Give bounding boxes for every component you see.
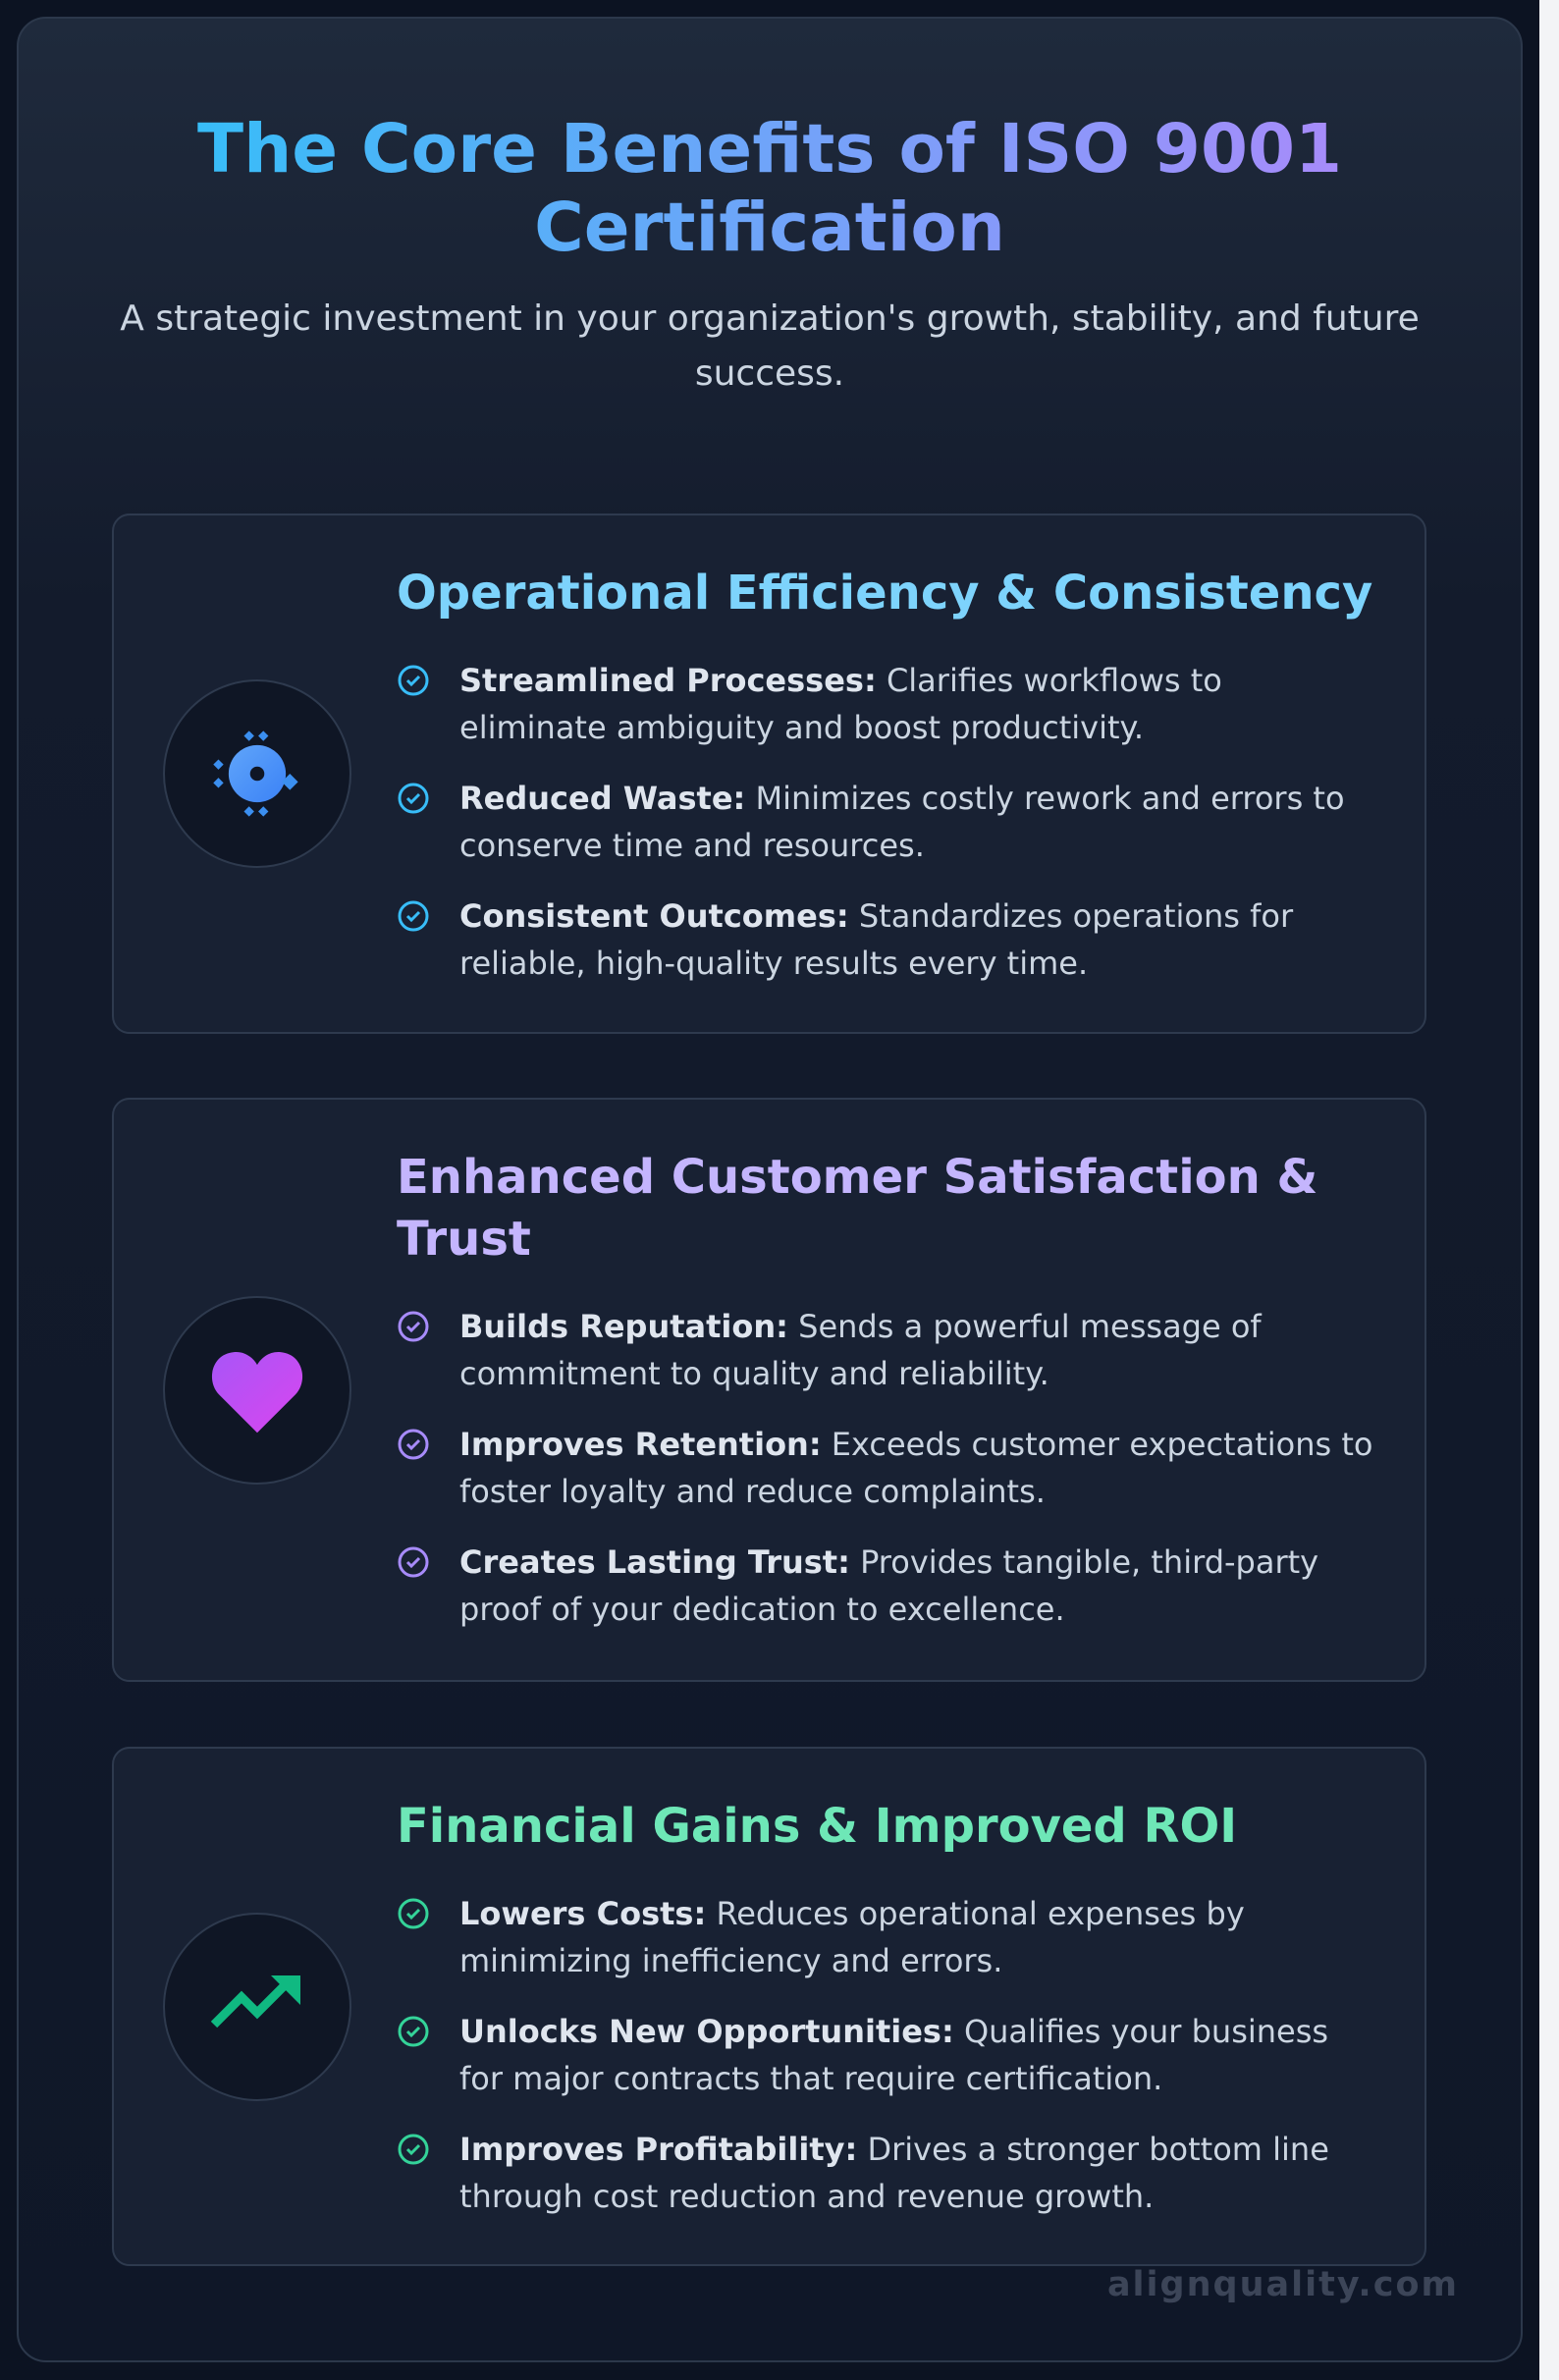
item: Creates Lasting Trust: Provides tangible, third-party proof of your dedication to excellence. bbox=[459, 1543, 1318, 1628]
text block bbox=[397, 566, 1372, 982]
heading: Enhanced Customer Satisfaction & Trust bbox=[397, 1150, 1317, 1267]
heading: Financial Gains & Improved ROI bbox=[397, 1799, 1237, 1854]
text block bbox=[397, 1799, 1329, 2215]
item: Improves Profitability: Drives a stronger bottom line through cost reduction and revenue growth. bbox=[459, 2131, 1329, 2215]
title: The Core Benefits of ISO 9001 bbox=[197, 110, 1342, 189]
item: Consistent Outcomes: Standardizes operations for reliable, high-quality results every time. bbox=[459, 897, 1293, 982]
icon: trend arrow bbox=[163, 1913, 351, 2101]
item: Improves Retention: Exceeds customer expectations to foster loyalty and reduce complaints. bbox=[459, 1426, 1372, 1510]
item: Streamlined Processes: Clarifies workflows to eliminate ambiguity and boost productivity. bbox=[459, 662, 1222, 746]
item: Lowers Costs: Reduces operational expenses by minimizing inefficiency and errors. bbox=[459, 1895, 1245, 1979]
icon: gear bbox=[163, 679, 351, 868]
subtitle: A strategic investment in your organization's growth, stability, and future success. bbox=[120, 298, 1420, 394]
watermark: alignquality.com bbox=[1107, 2265, 1459, 2304]
icon: heart bbox=[163, 1296, 351, 1485]
item: Builds Reputation: Sends a powerful message of commitment to quality and reliability. bbox=[459, 1308, 1262, 1392]
panel: customer satisfaction bbox=[112, 1098, 1426, 1682]
item: Reduced Waste: Minimizes costly rework and errors to conserve time and resources. bbox=[459, 780, 1345, 864]
text block bbox=[397, 1150, 1372, 1628]
title bbox=[197, 110, 1342, 267]
title: Certification bbox=[534, 189, 1005, 267]
panel: financial gains bbox=[112, 1747, 1426, 2266]
item: Unlocks New Opportunities: Qualifies your business for major contracts that require certification. bbox=[459, 2013, 1328, 2097]
panel: operational efficiency bbox=[112, 514, 1426, 1034]
heading: Operational Efficiency & Consistency bbox=[397, 566, 1372, 621]
